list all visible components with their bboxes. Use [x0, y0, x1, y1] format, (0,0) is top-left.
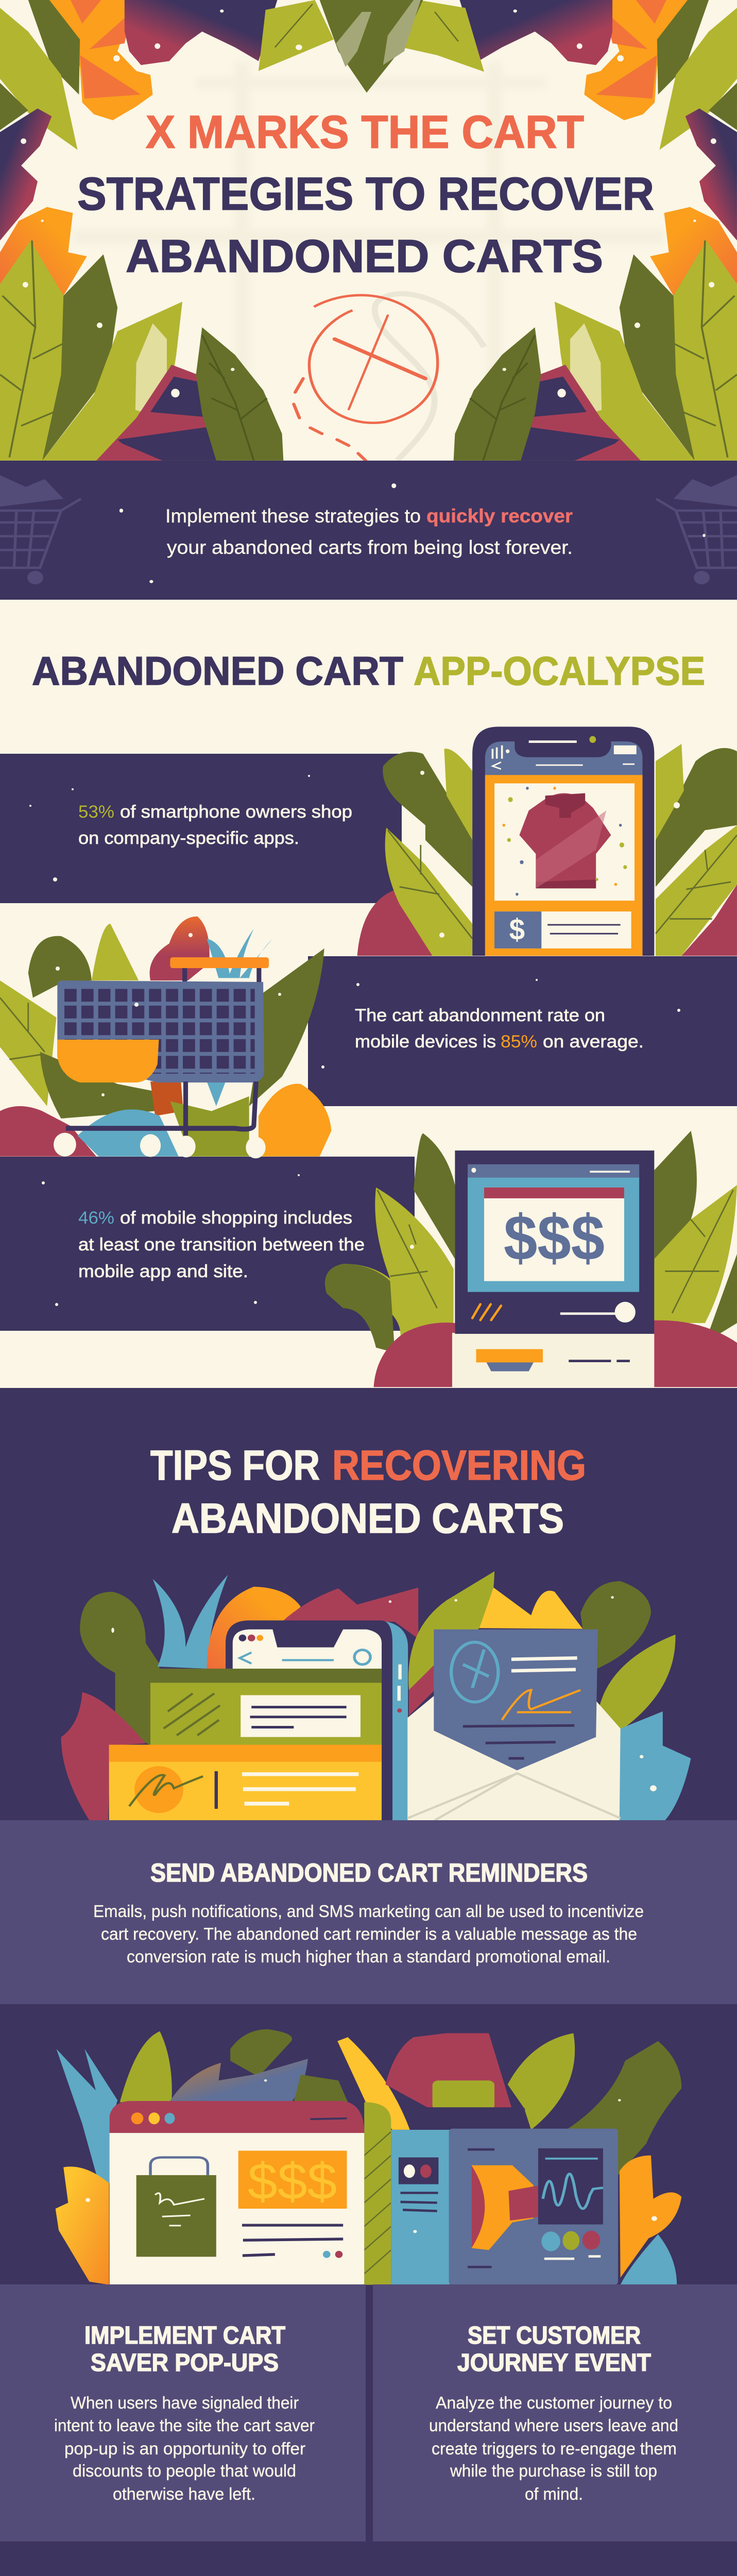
illustration: shopping cart in foliage — [0, 917, 331, 1158]
body text — [93, 1902, 644, 1966]
intro text: quickly recover — [426, 505, 573, 527]
stat text 1: 53% — [78, 802, 114, 822]
body text — [54, 2393, 315, 2503]
body text: of mind. — [525, 2484, 583, 2503]
body text: understand where users leave and — [429, 2416, 678, 2435]
body text: When users have signaled their — [71, 2393, 299, 2412]
panel: implement cart saver pop-ups — [0, 2284, 366, 2541]
illustration: pop-up browser and journey machine — [56, 2029, 681, 2285]
icon: X mark circled on treasure map — [294, 294, 484, 461]
stat text 2: The cart abandonment rate on — [355, 1006, 605, 1025]
body text: otherwise have left. — [113, 2484, 255, 2503]
heading — [457, 2322, 651, 2377]
panel: intro band — [0, 461, 737, 600]
title line 1: X MARKS THE CART — [146, 107, 584, 158]
title line 2: STRATEGIES TO RECOVER — [77, 168, 654, 220]
heading: tips for recovering abandoned carts — [150, 1442, 586, 1542]
body text: discounts to people that would — [73, 2461, 296, 2480]
stat band 1 — [0, 754, 402, 903]
stat text 3: of mobile shopping includes — [120, 1208, 352, 1228]
body text: Emails, push notifications, and SMS marketing can all be used to incentivize — [93, 1902, 644, 1921]
dollar signs on promo card: $$$ — [248, 2153, 337, 2210]
stat text 1: of smartphone owners shop — [120, 802, 352, 822]
stat text 3 — [78, 1208, 365, 1281]
illustration: phone with shirt — [357, 726, 737, 956]
heading: tips for recovering abandoned carts: ABANDONED CARTS — [172, 1495, 564, 1542]
hero illustration: foliage frame — [0, 0, 737, 461]
body text: create triggers to re-engage them — [432, 2439, 677, 2458]
stat text 2 — [355, 1006, 644, 1052]
panel: abandoned cart app-ocalypse — [0, 600, 737, 1388]
stat text 3: at least one transition between the — [78, 1235, 365, 1255]
intro text — [165, 505, 573, 558]
section heading — [32, 648, 705, 693]
body text: cart recovery. The abandoned cart reminder is a valuable message as the — [101, 1924, 637, 1943]
stat text 1: on company-specific apps. — [78, 828, 299, 848]
heading: SEND ABANDONED CART REMINDERS — [150, 1858, 588, 1887]
body text: while the purchase is still top — [450, 2461, 657, 2480]
heading: SET CUSTOMER — [468, 2322, 641, 2349]
illustration: reminders phone cards and envelope — [61, 1571, 691, 1820]
body text — [429, 2393, 678, 2503]
panel: send abandoned cart reminders — [0, 1820, 737, 2004]
panel: hero header — [0, 0, 737, 461]
heading: tips for recovering abandoned carts: TIPS FOR — [150, 1442, 320, 1489]
dollar signs: $$$ — [504, 1202, 605, 1274]
body text: intent to leave the site the cart saver — [54, 2416, 315, 2435]
title line 3: ABANDONED CARTS — [126, 231, 603, 282]
illustration: phone with shirt: $ — [509, 913, 525, 946]
intro text: Implement these strategies to — [165, 505, 421, 527]
stat text 1 — [78, 802, 352, 848]
heading: SAVER POP-UPS — [91, 2349, 279, 2377]
body text: conversion rate is much higher than a standard promotional email. — [127, 1947, 610, 1966]
stat text 2: mobile devices is — [355, 1032, 496, 1052]
specks on bands — [29, 771, 680, 1306]
stat band 2 — [308, 956, 737, 1106]
heading: JOURNEY EVENT — [457, 2349, 651, 2377]
heading: IMPLEMENT CART — [84, 2322, 285, 2349]
stat text 2: on average. — [543, 1032, 644, 1052]
icon: faded shopping carts — [0, 475, 737, 584]
heading — [84, 2322, 285, 2377]
section heading: ABANDONED CART — [32, 648, 403, 693]
stat text 3: mobile app and site. — [78, 1262, 248, 1281]
intro text: your abandoned carts from being lost forever. — [167, 537, 573, 558]
section heading: APP-OCALYPSE — [414, 648, 705, 693]
heading: tips for recovering abandoned carts: RECOVERING — [332, 1442, 586, 1489]
panel: set customer journey event — [373, 2284, 737, 2541]
body text: Analyze the customer journey to — [436, 2393, 672, 2412]
stat band 3 — [0, 1157, 415, 1331]
stat text 3: 46% — [78, 1208, 114, 1228]
body text: pop-up is an opportunity to offer — [64, 2439, 305, 2458]
illustration: monitor with dollars — [325, 1131, 737, 1387]
stat text 2: 85% — [501, 1032, 537, 1052]
